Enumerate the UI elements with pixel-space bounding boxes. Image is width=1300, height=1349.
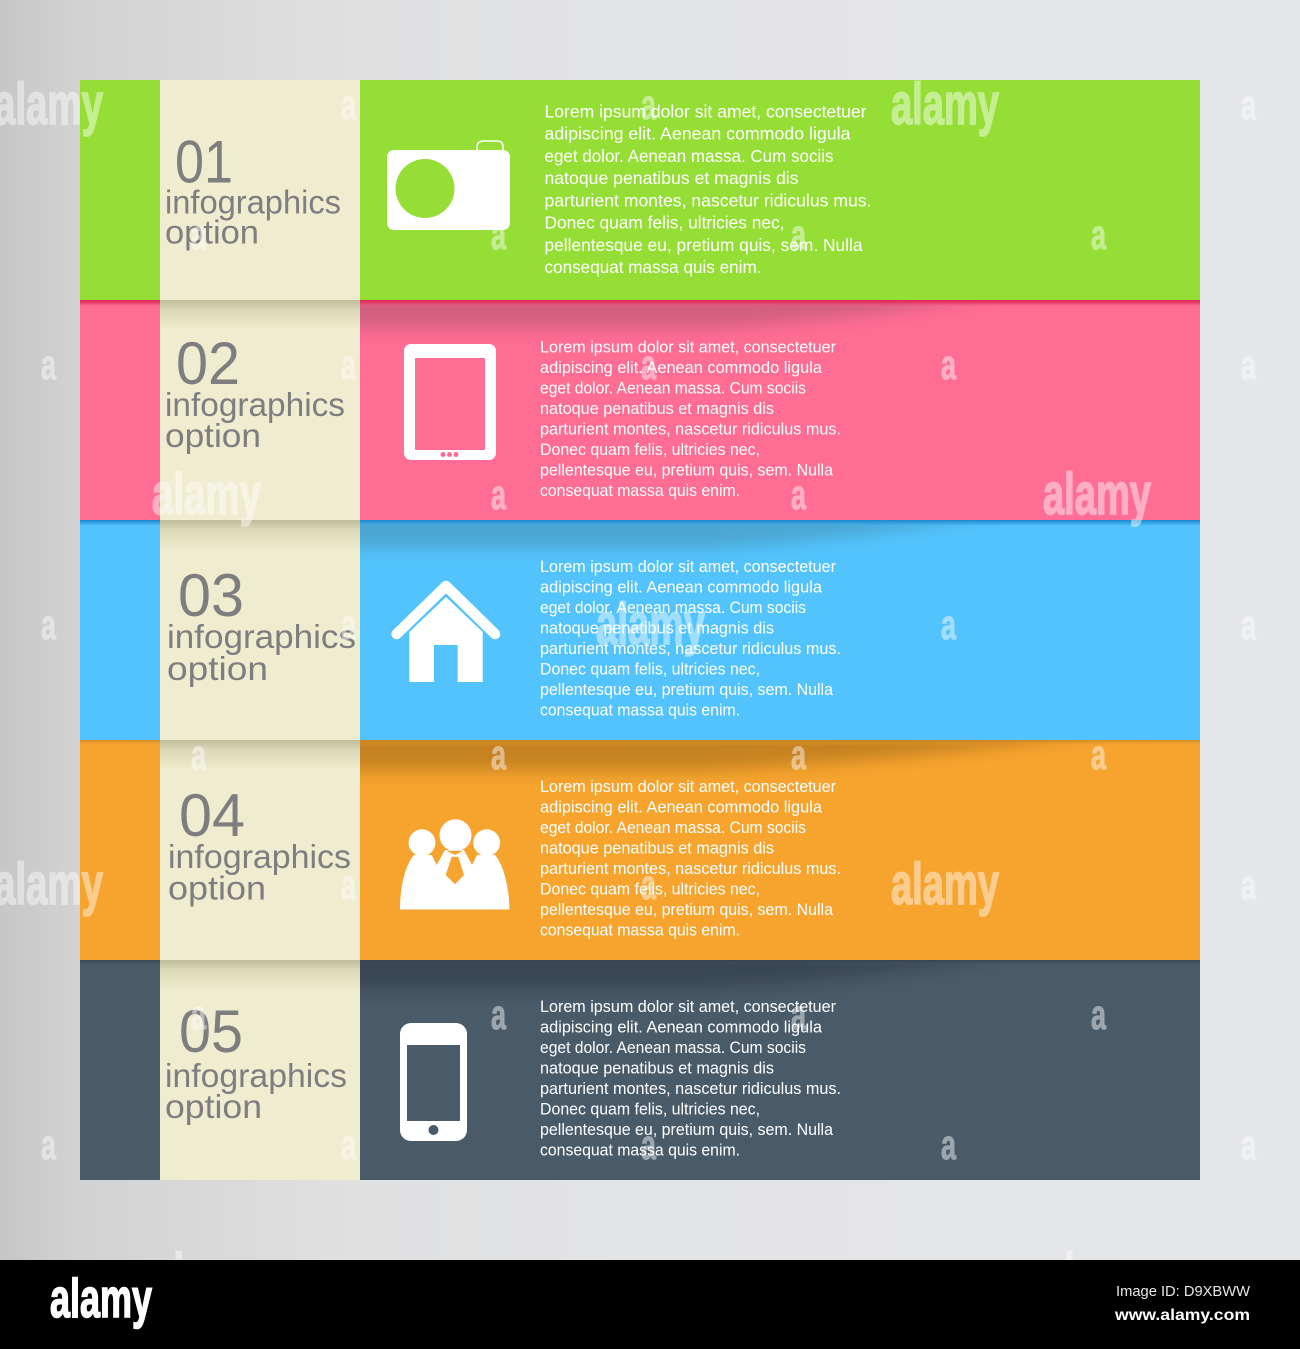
description text: Lorem ipsum dolor sit amet, consectetuer <box>540 998 837 1016</box>
description text: pellentesque eu, pretium quis, sem. Nulla <box>540 462 833 480</box>
number 03: 03 <box>178 562 244 629</box>
band: green <box>80 80 1200 300</box>
website: www.alamy.com <box>1114 1307 1250 1324</box>
description text: natoque penatibus et magnis dis <box>540 1059 774 1077</box>
band: slate <box>80 960 1200 1180</box>
watermarks: a <box>791 991 806 1038</box>
watermarks: a <box>1241 861 1256 908</box>
description text: natoque penatibus et magnis dis <box>544 168 798 188</box>
shadow on band <box>360 961 939 990</box>
description text: consequat massa quis enim. <box>540 921 740 939</box>
watermarks: a <box>641 341 656 388</box>
column shadow <box>160 960 360 990</box>
description text: Donec quam felis, ultricies nec, <box>540 1100 760 1118</box>
watermarks: alamy <box>1043 462 1151 527</box>
label <box>165 184 341 250</box>
watermarks: a <box>341 861 356 908</box>
watermarks: a <box>1241 1121 1256 1168</box>
description text: parturient montes, nascetur ridiculus mus. <box>540 1080 841 1098</box>
label: option <box>168 870 266 906</box>
label: infographics <box>165 1057 347 1094</box>
band top edge <box>80 520 1200 527</box>
description text: Lorem ipsum dolor sit amet, consectetuer <box>544 102 867 122</box>
band top edge <box>80 740 1200 746</box>
shadow on band <box>360 740 1056 777</box>
description text <box>540 778 841 939</box>
description text: pellentesque eu, pretium quis, sem. Nulla <box>540 901 833 919</box>
description text: Donec quam felis, ultricies nec, <box>540 660 760 678</box>
icon: people <box>400 819 510 910</box>
image id: Image ID: D9XBWW <box>1116 1283 1251 1300</box>
description text: consequat massa quis enim. <box>544 257 762 277</box>
description text: pellentesque eu, pretium quis, sem. Nulla <box>540 1121 833 1139</box>
watermarks: a <box>41 1121 56 1168</box>
label: option <box>165 1088 262 1125</box>
description text <box>540 558 841 719</box>
watermarks: a <box>791 471 806 518</box>
column shadow <box>160 740 360 770</box>
watermarks: a <box>491 991 506 1038</box>
watermarks: alamy <box>891 852 999 917</box>
watermarks: a <box>491 211 506 258</box>
watermarks: a <box>1091 731 1106 778</box>
label <box>168 838 351 906</box>
beige column <box>160 80 360 300</box>
watermarks: a <box>41 601 56 648</box>
label: option <box>167 650 268 687</box>
beige column <box>160 740 360 960</box>
band top edge <box>80 960 1200 966</box>
label: infographics <box>168 838 351 875</box>
watermarks: a <box>341 1121 356 1168</box>
description text: eget dolor. Aenean massa. Cum sociis <box>540 599 806 617</box>
icon: tablet <box>404 344 496 460</box>
watermarks: alamy <box>891 72 999 137</box>
watermarks: a <box>641 861 656 908</box>
watermarks: a <box>1241 341 1256 388</box>
description text: natoque penatibus et magnis dis <box>540 619 774 637</box>
shadow on band <box>360 522 958 555</box>
watermarks: a <box>941 1121 956 1168</box>
watermarks: a <box>941 341 956 388</box>
band: orange <box>80 740 1200 960</box>
panel: row 4 orange <box>80 722 1200 960</box>
description text: natoque penatibus et magnis dis <box>540 400 774 418</box>
description text: eget dolor. Aenean massa. Cum sociis <box>540 819 806 837</box>
description text: adipiscing elit. Aenean commodo ligula <box>540 798 822 816</box>
description text: pellentesque eu, pretium quis, sem. Nulla <box>544 235 863 255</box>
panel: row 5 slate <box>80 940 1200 1180</box>
label <box>165 1057 347 1125</box>
description text: consequat massa quis enim. <box>540 1141 740 1159</box>
watermarks: a <box>791 211 806 258</box>
watermarks: alamy <box>596 592 705 657</box>
panel: row 1 green <box>80 80 1200 300</box>
description text: consequat massa quis enim. <box>540 701 740 719</box>
watermarks: a <box>341 341 356 388</box>
watermarks: alamy <box>152 1242 261 1307</box>
icon: camera <box>387 141 510 230</box>
description text: natoque penatibus et magnis dis <box>540 839 774 857</box>
watermarks: a <box>191 991 206 1038</box>
description text: eget dolor. Aenean massa. Cum sociis <box>544 146 834 166</box>
description text: eget dolor. Aenean massa. Cum sociis <box>540 1039 806 1057</box>
number 01: 01 <box>175 128 233 196</box>
watermarks: a <box>641 81 656 128</box>
watermarks: a <box>491 471 506 518</box>
description text: Donec quam felis, ultricies nec, <box>540 880 760 898</box>
label <box>165 386 345 454</box>
column shadow <box>160 300 360 330</box>
number 05: 05 <box>179 998 243 1065</box>
band top edge <box>80 300 1200 307</box>
watermarks: a <box>941 601 956 648</box>
watermarks: alamy <box>1043 1242 1151 1307</box>
label: option <box>165 417 261 454</box>
description text: parturient montes, nascetur ridiculus mus. <box>540 640 841 658</box>
description text: parturient montes, nascetur ridiculus mus. <box>544 190 872 210</box>
description text: parturient montes, nascetur ridiculus mus. <box>540 860 841 878</box>
band: pink <box>80 300 1200 520</box>
watermarks: a <box>191 731 206 778</box>
watermarks: a <box>41 341 56 388</box>
label: option <box>165 214 259 250</box>
icon: house <box>397 586 495 682</box>
watermarks: a <box>1241 601 1256 648</box>
watermarks: a <box>1241 81 1256 128</box>
label: infographics <box>165 386 345 423</box>
panel: row 3 blue <box>80 500 1200 740</box>
watermarks: a <box>1091 991 1106 1038</box>
watermarks: a <box>341 81 356 128</box>
description text: eget dolor. Aenean massa. Cum sociis <box>540 380 806 398</box>
description text: Donec quam felis, ultricies nec, <box>540 441 760 459</box>
description text: adipiscing elit. Aenean commodo ligula <box>540 578 822 596</box>
description text: pellentesque eu, pretium quis, sem. Nulla <box>540 681 833 699</box>
description text: adipiscing elit. Aenean commodo ligula <box>540 1018 822 1036</box>
watermarks: a <box>1091 211 1106 258</box>
label: infographics <box>165 184 341 220</box>
watermarks: a <box>341 601 356 648</box>
description text: Donec quam felis, ultricies nec, <box>544 213 784 233</box>
beige column <box>160 520 360 740</box>
shadow on band <box>360 302 960 336</box>
label: infographics <box>167 618 356 655</box>
description text <box>544 102 872 277</box>
description text: parturient montes, nascetur ridiculus mus. <box>540 420 841 438</box>
watermarks: a <box>491 731 506 778</box>
icon: smartphone <box>400 1023 467 1141</box>
description text <box>540 998 841 1159</box>
description text <box>540 338 841 500</box>
description text: adipiscing elit. Aenean commodo ligula <box>544 124 851 144</box>
beige column <box>160 960 360 1180</box>
band: blue <box>80 520 1200 740</box>
label <box>167 618 356 687</box>
description text: consequat massa quis enim. <box>540 482 740 500</box>
description text: Lorem ipsum dolor sit amet, consectetuer <box>540 778 837 796</box>
watermarks: alamy <box>152 462 261 527</box>
watermarks: a <box>191 211 206 258</box>
description text: Lorem ipsum dolor sit amet, consectetuer <box>540 558 837 576</box>
column shadow <box>160 520 360 550</box>
watermarks: a <box>791 731 806 778</box>
description text: Lorem ipsum dolor sit amet, consectetuer <box>540 338 837 356</box>
number 02: 02 <box>176 330 240 397</box>
footer bar <box>0 1260 1300 1349</box>
footer logo: alamy <box>50 1267 152 1329</box>
watermarks: a <box>641 1121 656 1168</box>
beige column <box>160 300 360 520</box>
description text: adipiscing elit. Aenean commodo ligula <box>540 359 822 377</box>
panel: row 2 pink <box>80 280 1200 520</box>
number 04: 04 <box>179 782 245 849</box>
